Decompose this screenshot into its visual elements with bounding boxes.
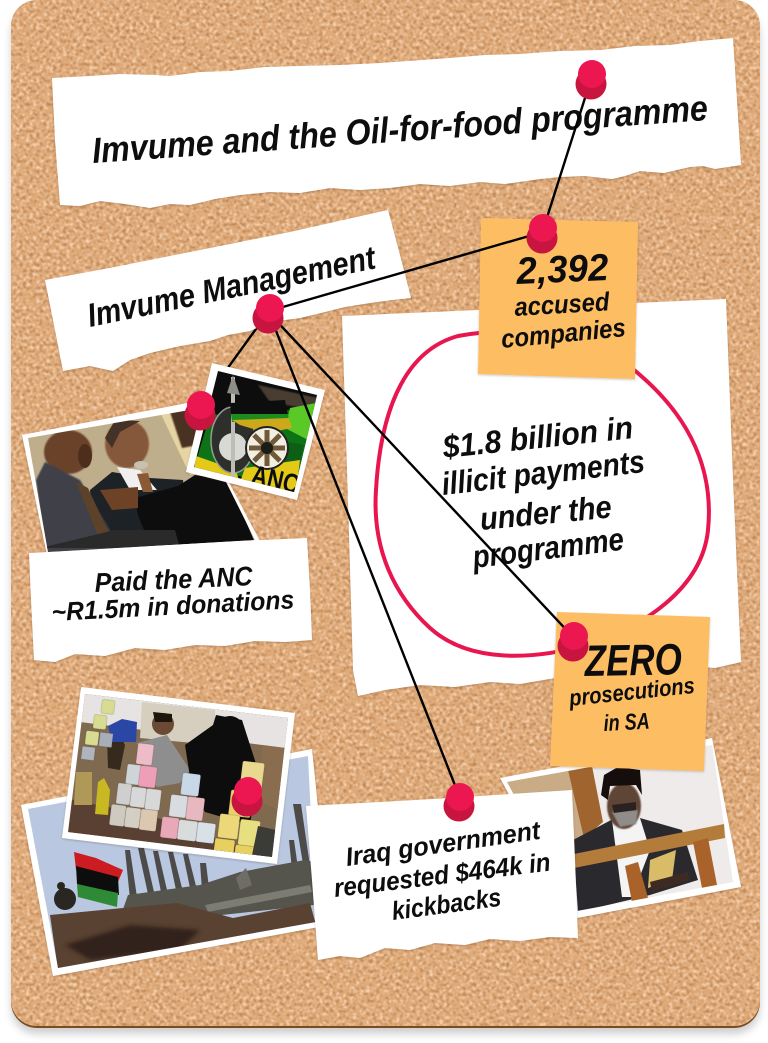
sticky note: zero prosecutions (550, 612, 710, 771)
panel: illicit payments note (342, 299, 741, 696)
panel: Imvume Management note (45, 210, 411, 371)
photo: Saddam Hussein in court (495, 735, 741, 920)
line: Imvume to ANC pin (201, 311, 269, 405)
ANC donations text: Paid the ANC (94, 561, 254, 598)
ANC donations text: ~R1.5m in donations (51, 584, 295, 627)
Iraq kickbacks text: kickbacks (390, 882, 503, 926)
prosecutions caption (567, 672, 696, 736)
prosecutions caption: in SA (603, 708, 650, 736)
Iraq kickbacks text (332, 815, 552, 926)
Imvume Management label: Imvume Management (84, 238, 380, 334)
photo: Mbeki and Zuma (20, 400, 265, 560)
accused caption: companies (500, 312, 627, 354)
pin: zero prosecutions (558, 622, 588, 662)
photo: ANC logo: ANC (249, 460, 302, 500)
illicit payments text: programme (470, 521, 626, 575)
illicit payments text: illicit payments (440, 443, 646, 502)
pin: accused companies (526, 214, 558, 254)
panel: ANC donations note (29, 538, 312, 662)
pin: food photo (232, 777, 262, 816)
connecting strings (269, 76, 592, 798)
zero figure: ZERO (583, 635, 682, 686)
photo: Libyan flag and refinery (20, 745, 330, 980)
illicit payments text (440, 409, 646, 575)
title text: Imvume and the Oil-for-food programme (91, 87, 709, 171)
ANC donations text (51, 561, 295, 627)
illicit payments text: under the (478, 488, 613, 537)
Iraq kickbacks text: requested $464k in (332, 847, 552, 903)
accused caption (500, 286, 627, 354)
accused caption: accused (514, 286, 611, 322)
panel: title note (52, 38, 741, 208)
prosecutions caption: prosecutions (567, 672, 696, 711)
pin: title (576, 60, 606, 100)
photo: food cans market (60, 687, 295, 865)
pin: Iraq note (444, 783, 474, 822)
pin: ANC photo (184, 391, 216, 430)
sticky note: 2,392 accused companies (478, 218, 638, 379)
panel: Iraq kickbacks note (306, 790, 578, 960)
illicit payments text: $1.8 billion in (440, 409, 635, 465)
photo: ANC logo (186, 363, 325, 500)
red circle annotation (376, 331, 709, 656)
pin: Imvume Management (252, 294, 284, 334)
Iraq kickbacks text: Iraq government (344, 815, 543, 872)
accused count: 2,392 (515, 247, 609, 293)
